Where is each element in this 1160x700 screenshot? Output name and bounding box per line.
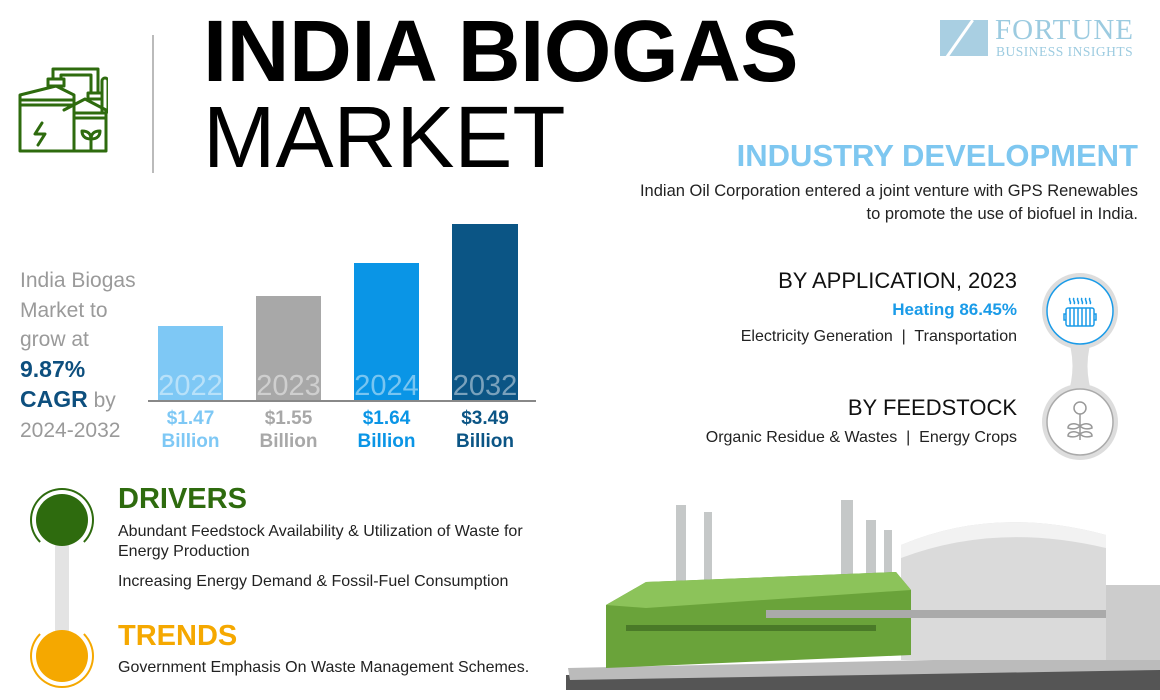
industry development: INDUSTRY DEVELOPMENT <box>737 138 1138 173</box>
by feedstock: Organic Residue & Wastes | Energy Crops <box>706 429 1017 446</box>
drivers <box>118 483 523 590</box>
bar chart: Billion <box>357 431 416 452</box>
by application: Electricity Generation | Transportation <box>741 328 1017 345</box>
trends <box>118 620 529 676</box>
drivers: Increasing Energy Demand & Fossil-Fuel Consumption <box>118 573 508 590</box>
CAGR text <box>20 269 136 442</box>
industry development: Indian Oil Corporation entered a joint venture with GPS Renewables <box>640 182 1138 200</box>
bar chart: $1.55 <box>265 408 312 429</box>
logo: FORTUNE <box>995 14 1134 46</box>
title <box>203 3 798 186</box>
industry development: to promote the use of biofuel in India. <box>866 205 1138 223</box>
bar chart: $3.49 <box>461 408 509 429</box>
CAGR text: India Biogas <box>20 269 136 292</box>
by feedstock <box>706 395 1017 446</box>
by feedstock: BY FEEDSTOCK <box>848 395 1017 420</box>
industry development <box>640 138 1138 223</box>
logo: BUSINESS INSIGHTS <box>996 44 1133 59</box>
trends: Government Emphasis On Waste Management Schemes. <box>118 659 529 676</box>
icons: application & feedstock <box>1042 273 1118 460</box>
bar chart: Billion <box>259 431 318 452</box>
CAGR text: grow at <box>20 328 89 351</box>
by application: BY APPLICATION, 2023 <box>778 268 1017 293</box>
bar chart: $1.64 <box>363 408 410 429</box>
divider <box>152 35 154 173</box>
CAGR text: 2024-2032 <box>20 418 120 442</box>
title: INDIA BIOGAS <box>203 3 798 100</box>
bar chart: $1.47 <box>167 408 214 429</box>
drivers: Abundant Feedstock Availability & Utilization of Waste for Energy Production <box>118 523 523 560</box>
trends: TRENDS <box>118 620 237 652</box>
drivers/trends icons <box>30 488 94 688</box>
icon: biogas plant <box>18 68 108 152</box>
image: biogas plant <box>566 500 1160 690</box>
bar chart: 2022 <box>158 370 223 402</box>
CAGR text: 9.87% <box>20 356 85 382</box>
by application <box>741 268 1017 345</box>
bar chart: Billion <box>456 431 514 452</box>
drivers: DRIVERS <box>118 483 247 515</box>
bar chart: 2024 <box>354 370 419 402</box>
bar chart: 2032 <box>453 370 517 402</box>
by application: Heating 86.45% <box>892 300 1017 319</box>
logo <box>940 14 1134 59</box>
CAGR text: CAGR by <box>20 386 116 412</box>
title: MARKET <box>203 89 566 186</box>
bar chart <box>148 224 536 452</box>
bar chart: Billion <box>161 431 220 452</box>
CAGR text: Market to <box>20 298 108 322</box>
bar chart: 2023 <box>256 370 321 402</box>
